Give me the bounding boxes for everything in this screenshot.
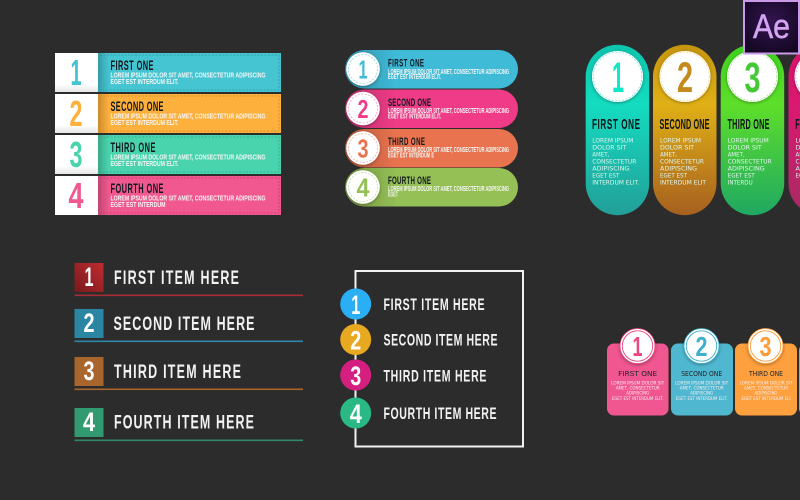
item 1 banner: FIRST ONE — [110, 59, 154, 74]
item 4 row: FOURTH ITEM HERE — [114, 412, 254, 433]
card 4 cropped at edge — [799, 344, 800, 416]
item 1 pill: EGET EST INTERDUM ELIT. — [388, 74, 441, 81]
item 4 pill: EGET — [388, 191, 398, 198]
capsule 3: DOLOR SIT — [728, 144, 762, 151]
card 2: AMET, CONSECTETUR — [680, 386, 724, 392]
capsule 4 cropped at edge — [788, 45, 800, 215]
card 2: 2 — [696, 331, 708, 362]
card 1: ADIPISCING — [626, 391, 650, 397]
item 4 pill: LOREM IPSUM DOLOR SIT AMET, CONSECTETUR ADIPISCING — [388, 186, 509, 193]
card 3: 3 — [760, 331, 772, 362]
capsule 2: DOLOR SIT — [660, 144, 694, 151]
capsule 3: THIRD ONE — [728, 118, 770, 133]
card 3: EGET EST INTERDUM ELI — [742, 396, 790, 402]
panel: rounded cards with circle badges — [607, 328, 800, 416]
capsule 3: AMET, — [728, 151, 745, 158]
card 2: ADIPISCING — [690, 391, 714, 397]
item 2 banner: EGET EST INTERDUM ELIT. — [110, 118, 178, 127]
item 4 row: 4 — [83, 407, 95, 437]
item 4 banner — [55, 175, 281, 216]
item 3 row: 3 — [84, 356, 94, 386]
item 4 pill: FOURTH ONE — [388, 174, 431, 186]
capsule 3 — [721, 45, 784, 215]
item 2 pill: 2 — [358, 94, 368, 124]
item 4 banner: LOREM IPSUM DOLOR SIT AMET, CONSECTETUR ADIPISCING — [110, 194, 266, 202]
item 2 banner: 2 — [70, 93, 82, 134]
item 3 circle row: 3 — [350, 361, 361, 391]
item 1 row — [74, 262, 303, 296]
card 3: AMET, CONSECTETUR — [744, 386, 789, 392]
item 1 row: 1 — [84, 262, 94, 292]
item 1 circle row — [340, 288, 484, 320]
item 1 row: FIRST ITEM HERE — [114, 267, 239, 289]
capsule 1: CONSECTETUR — [592, 158, 637, 165]
item 2 pill: SECOND ONE — [388, 96, 431, 108]
item 4 circle row — [340, 398, 497, 429]
card 1: 1 — [632, 331, 642, 362]
item 1 banner: EGET EST INTERDUM ELIT. — [110, 77, 178, 86]
item 3 banner: 3 — [70, 134, 82, 175]
item 2 pill: EGET EST INTERDUM ELIT. — [388, 113, 441, 120]
card 2: LOREM IPSUM DOLOR SIT — [675, 380, 728, 386]
item 2 pill: LOREM IPSUM DOLOR SIT AMET, CONSECTETUR ADIPISCING — [388, 108, 509, 115]
item 2 circle row: 2 — [350, 326, 361, 356]
item 1 banner: 1 — [70, 52, 82, 93]
panel: rounded pill list — [345, 50, 518, 206]
item 2 pill — [345, 90, 518, 128]
card 3: ADIPISCING — [754, 391, 778, 397]
capsule 2: ADIPISCING — [660, 165, 697, 172]
item 3 banner: LOREM IPSUM DOLOR SIT AMET, CONSECTETUR ADIPISCING — [110, 152, 266, 162]
item 3 pill — [345, 129, 518, 168]
item 4 banner: FOURTH ONE — [110, 182, 164, 197]
capsule 1: INTERDUM ELIT. — [592, 179, 639, 186]
icon: After Effects logo: Ae — [753, 8, 790, 46]
capsule 1: 1 — [612, 54, 624, 102]
item 3 pill: 3 — [358, 134, 368, 164]
card 3 — [735, 328, 797, 416]
item 1 banner: LOREM IPSUM DOLOR SIT AMET, CONSECTETUR ADIPISCING — [110, 70, 266, 80]
capsule 1: AMET, — [592, 151, 609, 158]
item 3 banner: EGET EST INTERDUM ELIT. — [110, 159, 178, 168]
capsule 3: ADIPISCING — [728, 165, 765, 172]
item 2 row: SECOND ITEM HERE — [114, 313, 255, 335]
capsule 1: FIRST ONE — [592, 117, 640, 133]
icon: After Effects logo — [744, 1, 799, 54]
item 2 circle row — [340, 324, 497, 356]
capsule 3: INTERDU — [728, 179, 753, 186]
item 1 pill: FIRST ONE — [388, 57, 424, 69]
item 2 banner — [55, 93, 281, 134]
item 3 banner: THIRD ONE — [110, 141, 155, 156]
item 2 row: 2 — [84, 308, 94, 338]
capsule 1 — [586, 45, 649, 215]
item 3 row — [74, 356, 303, 390]
item 1 banner — [55, 52, 281, 93]
item 1 pill: 1 — [358, 54, 368, 84]
item 1 pill — [345, 50, 518, 88]
card 2: SECOND ONE — [681, 369, 723, 378]
card 1: EGET EST INTERDUM ELIT. — [612, 396, 664, 402]
capsule 1: ADIPISCING — [592, 165, 630, 172]
capsule 3: EGET EST — [728, 172, 755, 179]
item 4 circle row: 4 — [350, 399, 362, 429]
capsule 1: EGET EST — [592, 172, 619, 179]
capsule 2: CONSECTETUR — [660, 158, 705, 165]
capsule 3: LOREM IPSUM — [728, 137, 769, 144]
capsule 2: 2 — [677, 54, 693, 102]
capsule 2: INTERDUM ELIT — [660, 179, 706, 186]
card 1 — [607, 328, 668, 416]
item 3 row: THIRD ITEM HERE — [114, 361, 241, 383]
capsule 3: CONSECTETUR — [728, 158, 772, 165]
panel: framed list with circles — [340, 271, 523, 446]
item 1 circle row: 1 — [351, 290, 360, 320]
capsule 1: LOREM IPSUM — [592, 137, 633, 144]
frame — [356, 271, 523, 446]
item 3 pill: THIRD ONE — [388, 135, 425, 147]
capsule 2 — [653, 45, 716, 215]
item 2 circle row: SECOND ITEM HERE — [384, 330, 497, 349]
item 2 banner: SECOND ONE — [110, 100, 164, 115]
card 2 — [671, 328, 733, 416]
card 2: EGET EST INTERDUM ELIT. — [676, 396, 728, 402]
item 3 pill: EGET EST INTERDUM E — [388, 152, 434, 159]
capsule 2: SECOND ONE — [660, 118, 710, 133]
item 4 pill: 4 — [356, 172, 370, 202]
item 1 pill: LOREM IPSUM DOLOR SIT AMET, CONSECTETUR ADIPISCING — [388, 69, 509, 76]
capsule 2: EGET EST — [660, 172, 687, 179]
item 4 row — [74, 407, 303, 441]
capsule 1: DOLOR SIT — [592, 144, 627, 151]
card 3: THIRD ONE — [748, 369, 783, 378]
item 4 banner: 4 — [68, 175, 84, 216]
card 3: LOREM IPSUM DOLOR SIT — [740, 380, 793, 386]
panel: square numbered list with stitched banners — [55, 52, 281, 216]
card 1: FIRST ONE — [618, 369, 658, 378]
capsule 2: LOREM IPSUM — [660, 137, 701, 144]
card 1: LOREM IPSUM DOLOR SIT — [611, 380, 664, 386]
capsule 2: AMET, — [660, 151, 677, 158]
item 4 pill — [345, 168, 518, 206]
item 1 circle row: FIRST ITEM HERE — [384, 295, 484, 314]
item 2 row — [74, 308, 303, 342]
item 3 pill: LOREM IPSUM DOLOR SIT AMET, CONSECTETUR ADIPISCING — [388, 147, 509, 154]
item 3 banner — [55, 134, 281, 175]
card 1: AMET, CONSECTETUR — [616, 386, 660, 392]
panel: numbered list with underlines — [74, 262, 303, 441]
item 3 circle row — [340, 360, 486, 391]
item 4 circle row: FOURTH ITEM HERE — [384, 404, 497, 423]
capsule 3: 3 — [744, 54, 760, 102]
item 4 banner: EGET EST INTERDUM — [110, 200, 166, 209]
panel: vertical gradient capsules — [586, 45, 800, 215]
item 2 banner: LOREM IPSUM DOLOR SIT AMET, CONSECTETUR ADIPISCING — [110, 112, 266, 120]
item 3 circle row: THIRD ITEM HERE — [384, 366, 486, 385]
